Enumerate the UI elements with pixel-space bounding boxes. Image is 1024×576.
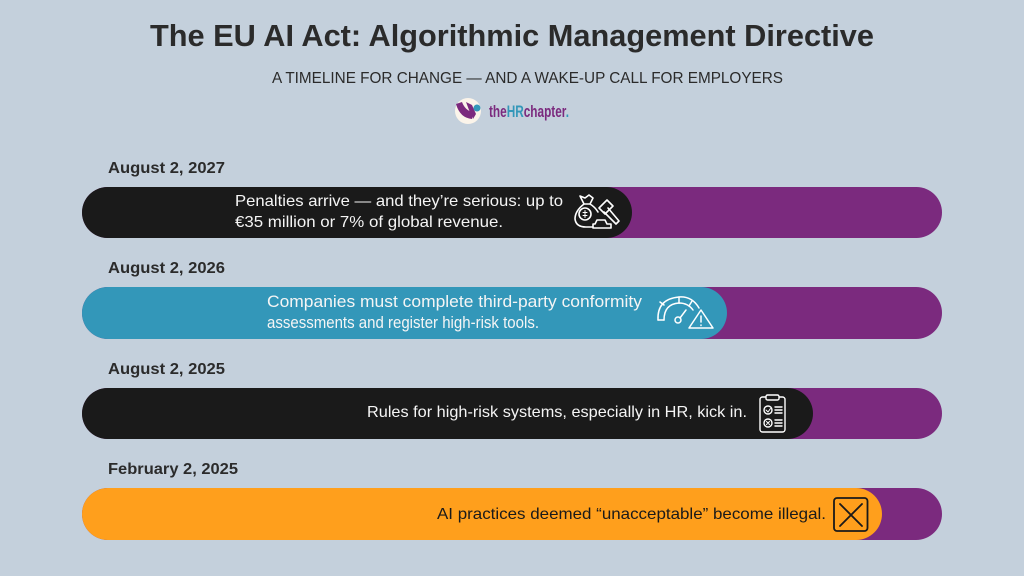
icon: crossed box — [834, 498, 868, 531]
icon: gauge with warning triangle — [658, 297, 713, 328]
description: AI practices deemed “unacceptable” become illegal. — [437, 506, 826, 523]
panel: August 2, 2026 — [82, 260, 942, 339]
black progress bar — [82, 187, 632, 238]
description: assessments and register high-risk tools. — [267, 314, 539, 332]
title: The EU AI Act: Algorithmic Management Directive — [150, 18, 874, 53]
date label: August 2, 2027 — [108, 160, 225, 177]
logo: theHRchapter — [455, 98, 569, 124]
blue progress bar — [82, 287, 727, 339]
subtitle: A TIMELINE FOR CHANGE — AND A WAKE-UP CALL FOR EMPLOYERS — [272, 70, 783, 87]
panel: February 2, 2025 — [82, 461, 942, 540]
date label: February 2, 2025 — [108, 461, 238, 478]
logo: theHRchapter: theHRchapter. — [489, 102, 569, 121]
purple track — [82, 488, 942, 540]
date label: August 2, 2025 — [108, 361, 225, 378]
description: Rules for high-risk systems, especially in HR, kick in. — [367, 404, 747, 421]
purple track — [82, 388, 942, 439]
panel: August 2, 2025 — [82, 361, 942, 439]
icon: money bag and gavel — [575, 195, 619, 228]
description: Penalties arrive — and they’re serious: up to — [235, 193, 563, 210]
icon: clipboard checklist — [760, 395, 785, 432]
description: €35 million or 7% of global revenue. — [235, 214, 503, 231]
description: Companies must complete third-party conformity — [267, 293, 643, 311]
purple track — [82, 287, 942, 339]
purple track — [82, 187, 942, 238]
date label: August 2, 2026 — [108, 260, 225, 277]
panel: August 2, 2027 — [82, 160, 942, 238]
orange progress bar — [82, 488, 882, 540]
black progress bar — [82, 388, 813, 439]
